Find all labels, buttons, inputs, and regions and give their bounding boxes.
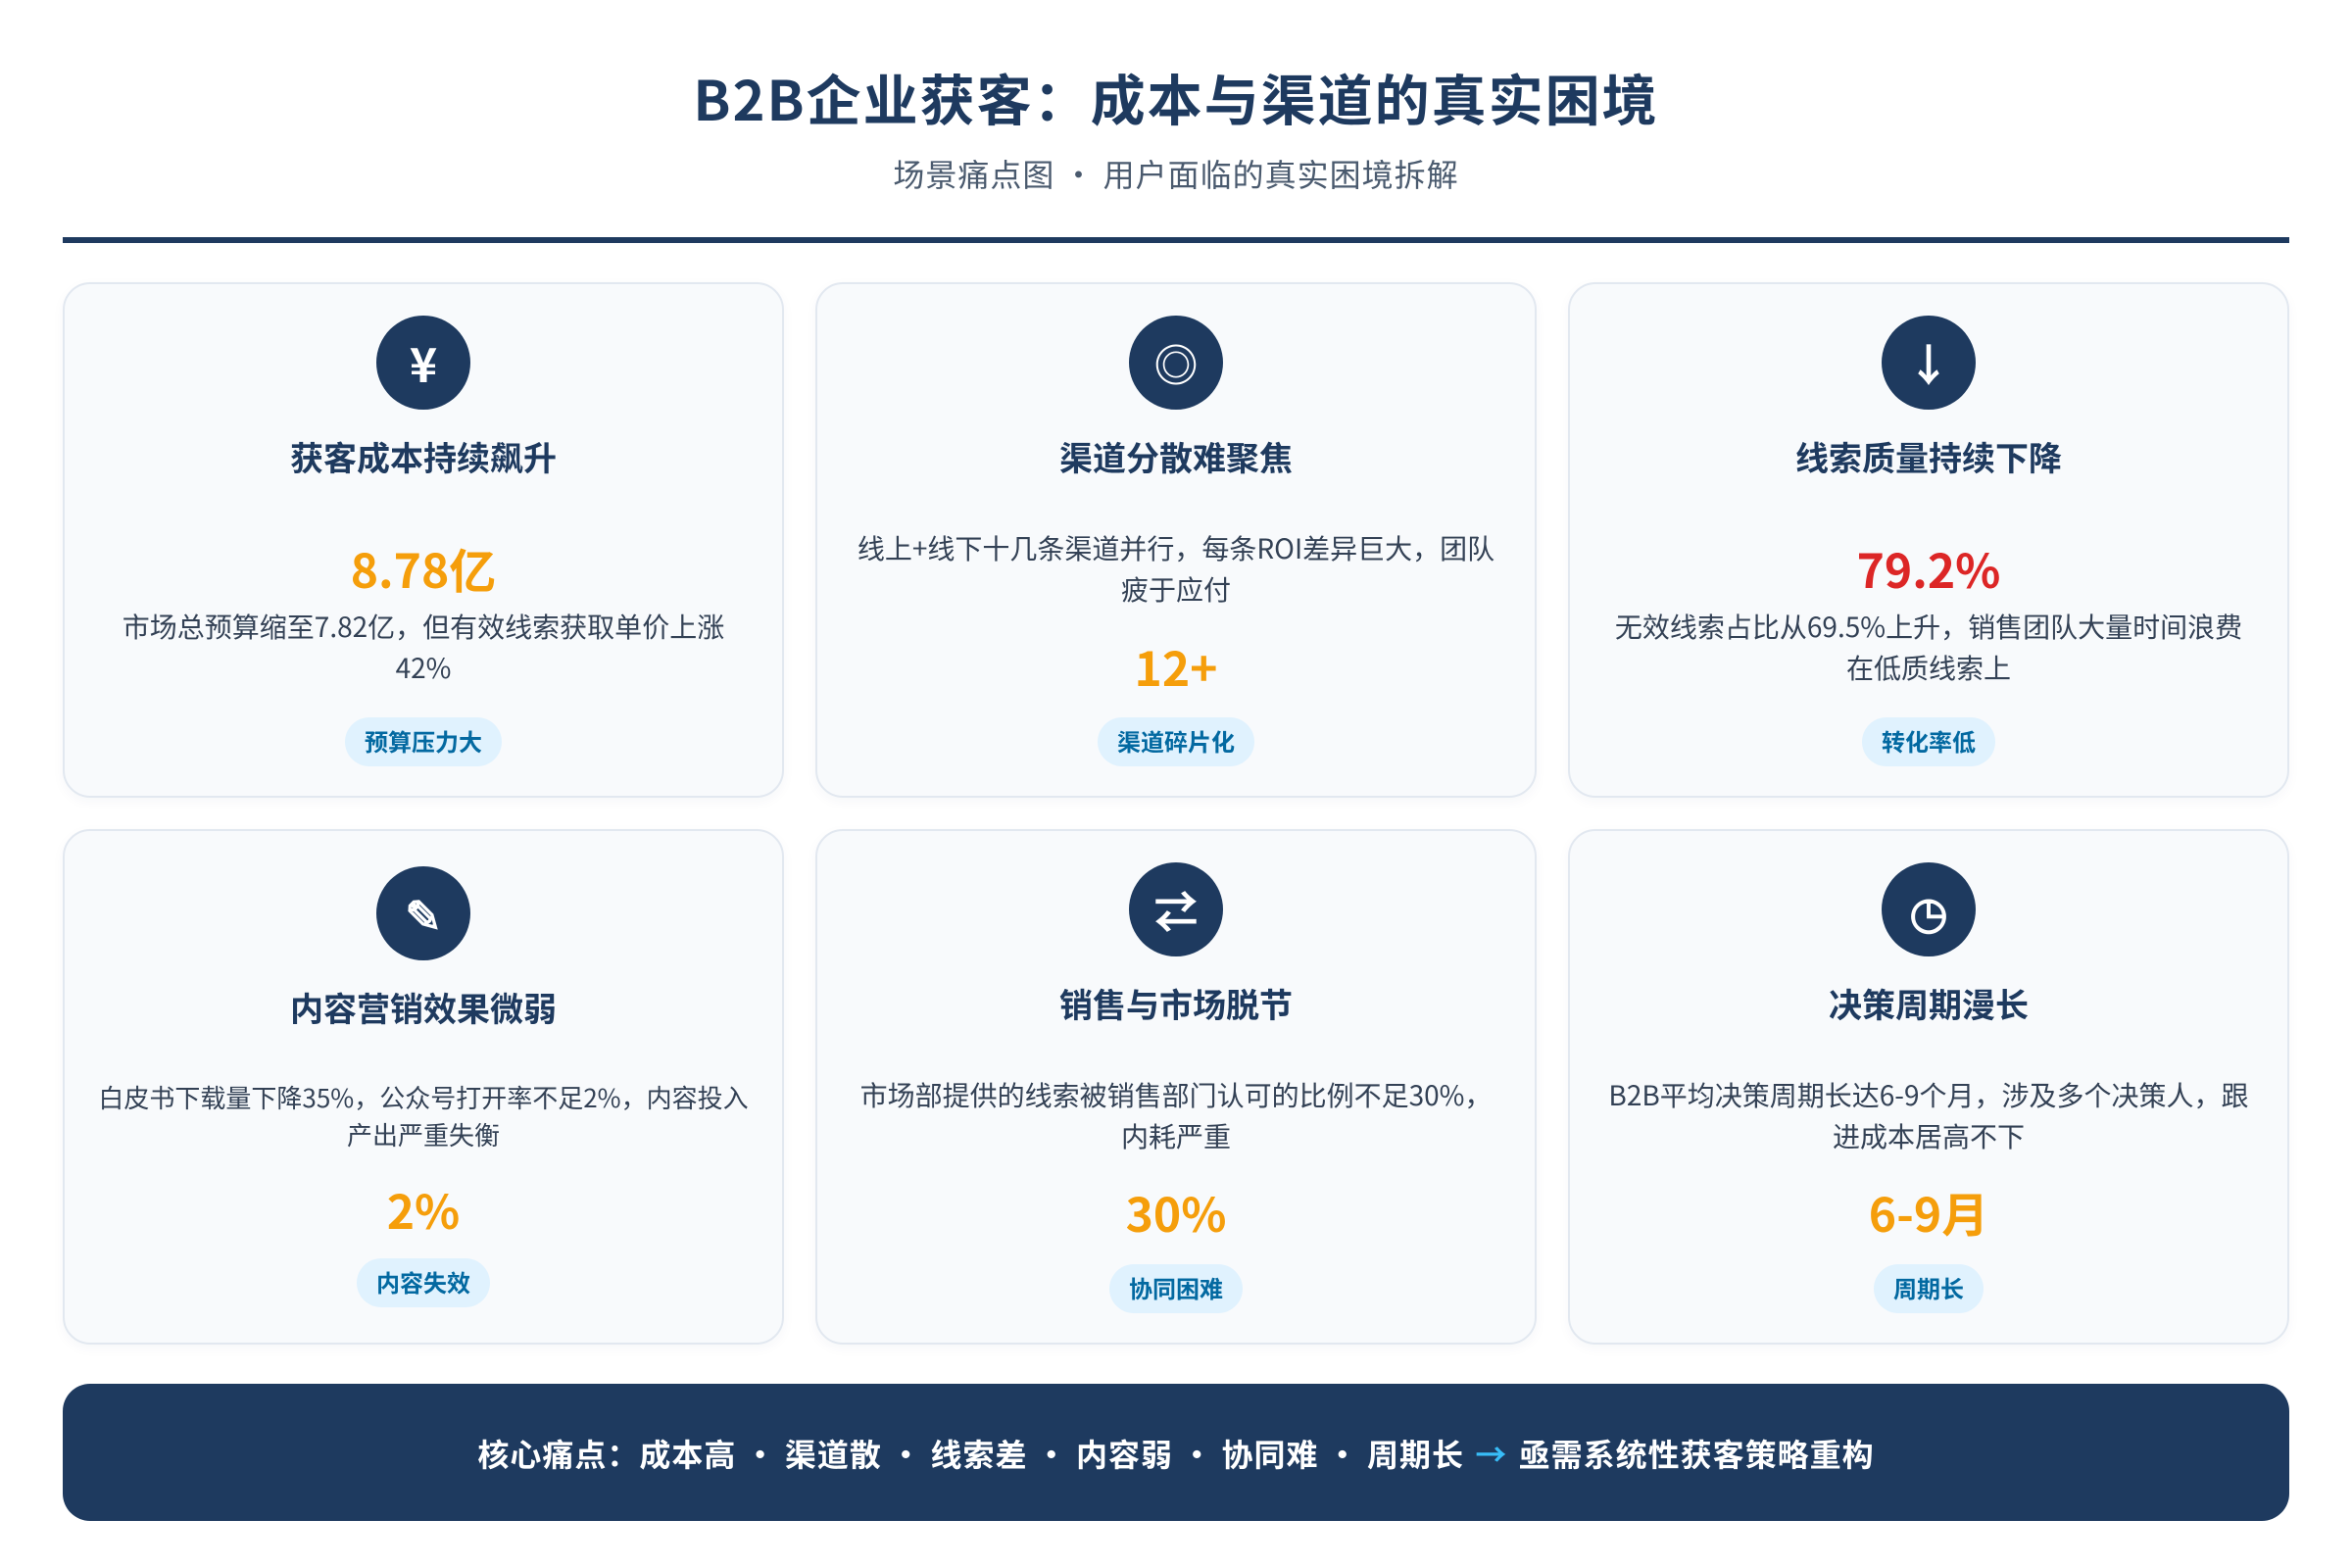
icon: target rings: ◎ [1153, 330, 1198, 394]
card heading: 内容营销效果微弱 [290, 983, 557, 1031]
tag [1109, 1264, 1243, 1313]
description: 市场部提供的线索被销售部门认可的比例不足30%， [860, 1075, 1492, 1114]
icon: clock: ◷ [1909, 877, 1948, 941]
icon: clock [1882, 862, 1976, 956]
description: 疲于应付 [1121, 569, 1231, 609]
callout: core pain points summary [63, 1384, 2289, 1521]
icon: target rings [1129, 316, 1223, 410]
description: 内耗严重 [1121, 1116, 1231, 1155]
header rule [63, 237, 2289, 243]
key figure: 6-9月 [1869, 1177, 1988, 1246]
description: 线上+线下十几条渠道并行，每条ROI差异巨大，团队 [858, 528, 1494, 567]
key figure: 8.78亿 [351, 533, 496, 602]
icon: down arrow: ↓ [1906, 330, 1950, 394]
panel: 渠道分散难聚焦 [815, 282, 1537, 798]
key figure: 12+ [1135, 631, 1217, 700]
description [122, 607, 724, 687]
title: B2B企业获客：成本与渠道的真实困境 [693, 58, 1659, 137]
icon: swap arrows: ⇄ [1153, 877, 1198, 941]
description: 产出严重失衡 [347, 1116, 500, 1152]
description: 进成本居高不下 [1833, 1116, 2025, 1155]
tag: 内容失效 [376, 1264, 470, 1298]
description: 白皮书下载量下降35%，公众号打开率不足2%，内容投入 [98, 1079, 749, 1115]
key figure: 2% [387, 1174, 460, 1243]
panel: 销售与市场脱节 [815, 829, 1537, 1345]
icon: yen: ¥ [410, 327, 437, 396]
tag [1862, 717, 1995, 766]
panel: 内容营销效果微弱 [63, 829, 784, 1345]
description: 无效线索占比从69.5%上升，销售团队大量时间浪费 [1615, 607, 2242, 646]
tag: 转化率低 [1882, 723, 1976, 758]
panel: 获客成本持续飙升 [63, 282, 784, 798]
description: 42% [396, 648, 451, 687]
panel: 决策周期漫长 [1568, 829, 2289, 1345]
tag [1874, 1264, 1984, 1313]
description [858, 528, 1494, 609]
panel: 线索质量持续下降 [1568, 282, 2289, 798]
description: 在低质线索上 [1846, 648, 2011, 687]
description [1615, 607, 2242, 687]
icon: swap arrows [1129, 862, 1223, 956]
tag [1098, 717, 1254, 766]
tag: 周期长 [1893, 1270, 1964, 1304]
callout: core pain points summary: 核心痛点：成本高 · 渠道散 · 线索差 · 内容弱 · 协同难 · 周期长 → 亟需系统性获客策略重构 [477, 1431, 1875, 1476]
icon: down arrow [1882, 316, 1976, 410]
tag: 预算压力大 [365, 723, 482, 758]
tag [345, 717, 502, 766]
icon: yen [376, 316, 470, 410]
icon: pencil [376, 866, 470, 960]
key figure: 79.2% [1857, 533, 2000, 602]
description: B2B平均决策周期长达6-9个月，涉及多个决策人，跟 [1608, 1075, 2249, 1114]
card heading: 线索质量持续下降 [1795, 432, 2062, 480]
icon: pencil: ✎ [405, 881, 442, 945]
description [98, 1079, 749, 1152]
description [1608, 1075, 2249, 1155]
card heading: 渠道分散难聚焦 [1059, 432, 1293, 480]
key figure: 30% [1126, 1177, 1226, 1246]
subtitle: 场景痛点图 · 用户面临的真实困境拆解 [893, 151, 1459, 196]
card heading: 决策周期漫长 [1829, 979, 2029, 1027]
description [860, 1075, 1492, 1155]
tag [357, 1258, 490, 1307]
description: 市场总预算缩至7.82亿，但有效线索获取单价上涨 [122, 607, 724, 646]
tag: 协同困难 [1129, 1270, 1223, 1304]
card heading: 获客成本持续飙升 [290, 432, 557, 480]
card heading: 销售与市场脱节 [1059, 979, 1293, 1027]
tag: 渠道碎片化 [1117, 723, 1235, 758]
